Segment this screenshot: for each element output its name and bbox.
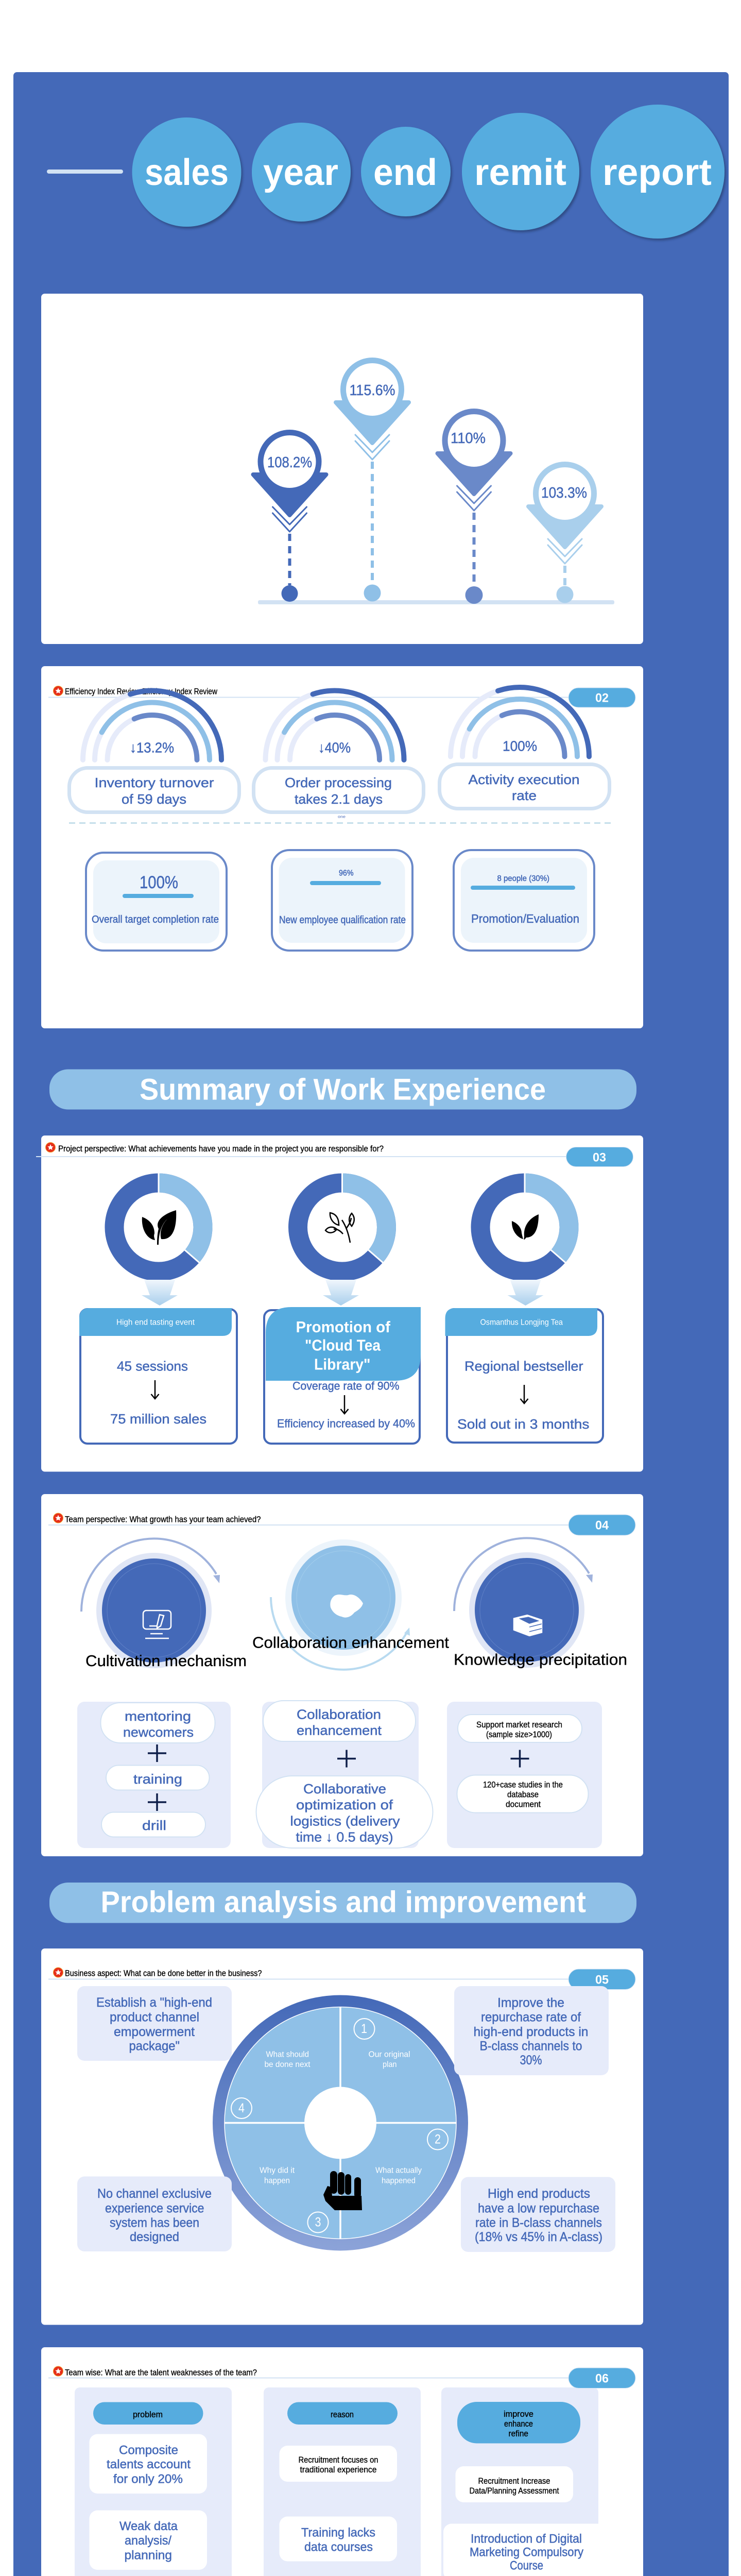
callout: bottom left: system has been xyxy=(110,2215,199,2230)
donut: cloud tea library xyxy=(298,1173,386,1272)
card: promotion of cloud tea library xyxy=(264,1307,421,1444)
chart: four step wheel xyxy=(213,1995,468,2250)
callout: bottom right xyxy=(461,2177,615,2252)
panel: project perspective xyxy=(36,1136,643,1471)
gauge: activity execution xyxy=(451,687,589,756)
card: promotion of cloud tea library: Library" xyxy=(314,1355,371,1374)
gauge: inventory: ↓13.2% xyxy=(130,740,174,755)
column: market research: document xyxy=(506,1799,541,1809)
title: year xyxy=(263,152,338,193)
column: improve: Data/Planning Assessment xyxy=(470,2486,559,2496)
chart: four step wheel: What should xyxy=(266,2050,309,2059)
chart: four step wheel: Our original xyxy=(369,2050,410,2059)
heading: team perspective: 04 xyxy=(595,1519,609,1532)
callout: bottom left: experience service xyxy=(105,2201,204,2215)
column: improve: refine xyxy=(509,2429,528,2438)
column: collaboration: optimization of xyxy=(296,1797,393,1812)
pin: 115.6% xyxy=(336,361,409,602)
label pill: order processing: Order processing xyxy=(285,775,392,790)
heading: team wise: Team wise: What are the talent weaknesses of the team? xyxy=(65,2368,257,2377)
arrow: down 2 xyxy=(323,1280,359,1306)
card: high end tasting event: High end tasting event xyxy=(116,1318,195,1327)
callout: top right: B-class channels to xyxy=(480,2039,582,2054)
column: problem: problem xyxy=(133,2410,163,2419)
column: mentoring training drill: newcomers xyxy=(123,1724,194,1740)
callout: top right: 30% xyxy=(520,2053,542,2067)
column: collaboration: Collaborative xyxy=(303,1781,386,1797)
gauge: order processing: ↓40% xyxy=(318,740,351,755)
icon: tea leaves small xyxy=(512,1214,539,1240)
column: market research: (sample size>1000) xyxy=(486,1730,552,1739)
pin: 108.2% xyxy=(253,433,326,602)
circle: cultivation mechanism xyxy=(81,1538,247,1670)
pin: 110%: 110% xyxy=(451,430,486,447)
column: collaboration: Collaboration xyxy=(297,1706,381,1722)
chart: four step wheel: plan xyxy=(383,2060,397,2069)
callout: bottom right: High end products xyxy=(488,2187,590,2201)
callout: bottom right: rate in B-class channels xyxy=(475,2215,602,2230)
circle: knowledge precipitation: Knowledge precipitation xyxy=(454,1651,627,1668)
panel: business aspect xyxy=(41,1948,643,2325)
card: high end tasting event xyxy=(79,1308,237,1444)
callout: bottom right: (18% vs 45% in A-class) xyxy=(475,2230,602,2244)
column: problem: Composite xyxy=(119,2443,178,2458)
column: market research: database xyxy=(507,1790,539,1799)
stat box: new employee xyxy=(272,850,412,951)
column: reason: reason xyxy=(331,2410,354,2419)
column: improve: Marketing Compulsory xyxy=(470,2545,583,2560)
card: osmanthus longjing tea: Osmanthus Longjing Tea xyxy=(480,1318,563,1327)
panel: efficiency index review xyxy=(41,666,643,1028)
column: mentoring training drill xyxy=(77,1702,231,1848)
callout: top right: Improve the xyxy=(497,1996,564,2010)
heading: business aspect: Business aspect: What can be done better in the business? xyxy=(65,1968,262,1978)
icon: tea leaves solid xyxy=(142,1210,176,1245)
chart: four step wheel: What actually xyxy=(375,2166,422,2175)
label pill: order processing: takes 2.1 days xyxy=(295,791,383,807)
callout: top left: package" xyxy=(129,2039,180,2054)
donut: tasting event xyxy=(114,1173,203,1272)
label pill: activity execution: Activity execution xyxy=(469,772,580,787)
heading: efficiency: Efficiency Index Review Efficiency Index Review xyxy=(65,686,218,697)
panel: achievement pins xyxy=(41,294,643,644)
title: sales xyxy=(145,152,229,193)
stat box: overall target: Overall target completion rate xyxy=(92,914,219,925)
label pill: inventory turnover: of 59 days xyxy=(122,791,186,807)
column: problem: analysis/ xyxy=(125,2534,171,2548)
card: high end tasting event: 75 million sales xyxy=(110,1411,206,1427)
heading: efficiency xyxy=(48,686,635,707)
card: osmanthus longjing tea: Regional bestseller xyxy=(464,1358,583,1374)
heading: problem analysis and improvement: Problem analysis and improvement xyxy=(101,1886,586,1919)
column: reason: Recruitment focuses on xyxy=(299,2455,378,2465)
icon: stack of books xyxy=(513,1614,543,1637)
gauge: inventory xyxy=(83,690,221,760)
arrow: down 1 xyxy=(142,1280,178,1306)
pin: 103.3%: 103.3% xyxy=(541,485,587,501)
card: high end tasting event: 45 sessions xyxy=(117,1358,188,1374)
column: mentoring training drill: mentoring xyxy=(125,1708,191,1724)
heading: summary of work experience: Summary of Work Experience xyxy=(140,1073,546,1107)
donut: longjing tea xyxy=(480,1173,569,1272)
chart: four step wheel: happened xyxy=(382,2176,416,2185)
icon: tea sprig outline xyxy=(325,1213,354,1243)
card: osmanthus longjing tea: Sold out in 3 months xyxy=(457,1416,589,1432)
heading: team perspective xyxy=(48,1513,635,1535)
heading: project perspective: Project perspective: What achievements have you made in the project you are responsible for? xyxy=(58,1144,384,1154)
stat box: overall target xyxy=(86,853,227,951)
chart base line xyxy=(258,600,614,604)
callout: top left: product channel xyxy=(110,2010,199,2025)
card: promotion of cloud tea library: "Cloud Tea xyxy=(305,1336,381,1354)
icon: fist xyxy=(323,2171,362,2210)
card: osmanthus longjing tea xyxy=(445,1308,603,1443)
pin: 115.6%: 115.6% xyxy=(349,382,395,399)
callout: bottom left: No channel exclusive xyxy=(97,2187,212,2201)
heading: team wise: 06 xyxy=(595,2372,609,2385)
stat box: new employee: New employee qualification rate xyxy=(279,914,406,926)
pin: 110% xyxy=(438,411,511,604)
heading: team wise xyxy=(48,2366,635,2388)
label pill: activity execution: rate xyxy=(512,788,537,803)
chart: four step wheel: Why did it xyxy=(260,2166,295,2175)
heading: project perspective: 03 xyxy=(593,1151,606,1164)
icon: monitor and pen xyxy=(143,1611,171,1638)
chart: four step wheel: happen xyxy=(264,2176,290,2185)
heading: business aspect xyxy=(48,1968,635,1990)
circle: knowledge precipitation xyxy=(454,1538,627,1668)
callout: top left: empowerment xyxy=(114,2025,195,2039)
small note: one xyxy=(338,815,346,819)
column: improve: improve xyxy=(504,2409,533,2419)
circle: collaboration enhancement: Collaboration enhancement xyxy=(252,1633,449,1652)
column: collaboration xyxy=(256,1701,433,1848)
column: collaboration: time ↓ 0.5 days) xyxy=(296,1829,393,1844)
chart: four step wheel: be done next xyxy=(265,2060,311,2069)
pin: 103.3% xyxy=(528,465,601,603)
column: improve: Introduction of Digital xyxy=(471,2532,582,2546)
column: collaboration: logistics (delivery xyxy=(290,1814,400,1829)
pin: 108.2%: 108.2% xyxy=(267,454,312,471)
column: improve: Course xyxy=(510,2558,543,2573)
chart: four step wheel: 1 xyxy=(361,2022,367,2036)
title: remit xyxy=(474,152,566,193)
gauge: activity execution: 100% xyxy=(503,738,537,754)
column: mentoring training drill: training xyxy=(133,1771,182,1787)
label pill: order processing xyxy=(253,768,423,812)
panel: team perspective xyxy=(41,1494,643,1856)
callout: bottom left: designed xyxy=(130,2230,179,2244)
heading: project perspective xyxy=(36,1143,633,1166)
column: improve xyxy=(441,2387,610,2576)
title xyxy=(47,105,725,239)
column: improve: Recruitment Increase xyxy=(478,2476,550,2486)
column: market research xyxy=(447,1702,602,1848)
callout: top right: repurchase rate of xyxy=(481,2010,581,2025)
stat box: promotion: 8 people (30%) xyxy=(497,874,549,883)
callout: top right xyxy=(454,1986,609,2075)
column: problem: for only 20% xyxy=(113,2472,183,2486)
column: problem: planning xyxy=(125,2548,172,2563)
column: collaboration: enhancement xyxy=(297,1723,382,1738)
chart: four step wheel: 3 xyxy=(315,2215,321,2230)
chart: four step wheel: 2 xyxy=(435,2132,441,2146)
column: reason: traditional experience xyxy=(300,2465,377,2475)
column: problem xyxy=(75,2387,232,2576)
circle: cultivation mechanism: Cultivation mechanism xyxy=(85,1652,247,1670)
column: problem: Weak data xyxy=(119,2519,178,2533)
label pill: inventory turnover: Inventory turnover xyxy=(95,775,214,790)
column: reason: Training lacks xyxy=(301,2526,375,2540)
callout: top left: Establish a "high-end xyxy=(96,1995,212,2010)
heading: business aspect: 05 xyxy=(595,1973,609,1987)
callout: top right: high-end products in xyxy=(474,2025,588,2039)
column: reason xyxy=(264,2387,421,2576)
column: market research: 120+case studies in the xyxy=(483,1780,563,1790)
heading: team perspective: Team perspective: What growth has your team achieved? xyxy=(65,1515,261,1524)
stat box: overall target: 100% xyxy=(140,873,178,892)
chart: four step wheel: 4 xyxy=(238,2101,245,2115)
column: problem: talents account xyxy=(107,2458,191,2471)
gauge: order processing xyxy=(266,690,404,760)
panel: team weaknesses xyxy=(41,2347,643,2576)
heading: efficiency: 02 xyxy=(595,691,609,705)
circle: collaboration enhancement xyxy=(252,1539,449,1670)
icon: handshake xyxy=(330,1595,363,1618)
callout: top left xyxy=(77,1986,232,2061)
arrow: down 3 xyxy=(508,1280,544,1306)
column: mentoring training drill: drill xyxy=(142,1818,166,1833)
stat box: promotion: Promotion/Evaluation xyxy=(471,912,579,925)
label pill: inventory turnover xyxy=(69,768,239,812)
heading: summary of work experience xyxy=(49,1070,636,1110)
callout: bottom right: have a low repurchase xyxy=(478,2201,599,2215)
column: reason: data courses xyxy=(304,2540,373,2554)
stat box: promotion xyxy=(454,850,594,951)
label pill: activity execution xyxy=(440,765,610,809)
title: report xyxy=(602,152,712,193)
title: end xyxy=(373,152,437,193)
card: promotion of cloud tea library: Coverage rate of 90% xyxy=(292,1380,400,1392)
callout: bottom left xyxy=(77,2176,232,2251)
stat box: new employee: 96% xyxy=(339,869,353,878)
column: market research: Support market research xyxy=(476,1720,562,1730)
card: promotion of cloud tea library: Efficiency increased by 40% xyxy=(277,1417,415,1430)
column: improve: enhance xyxy=(504,2419,533,2429)
card: promotion of cloud tea library: Promotion of xyxy=(296,1318,391,1336)
